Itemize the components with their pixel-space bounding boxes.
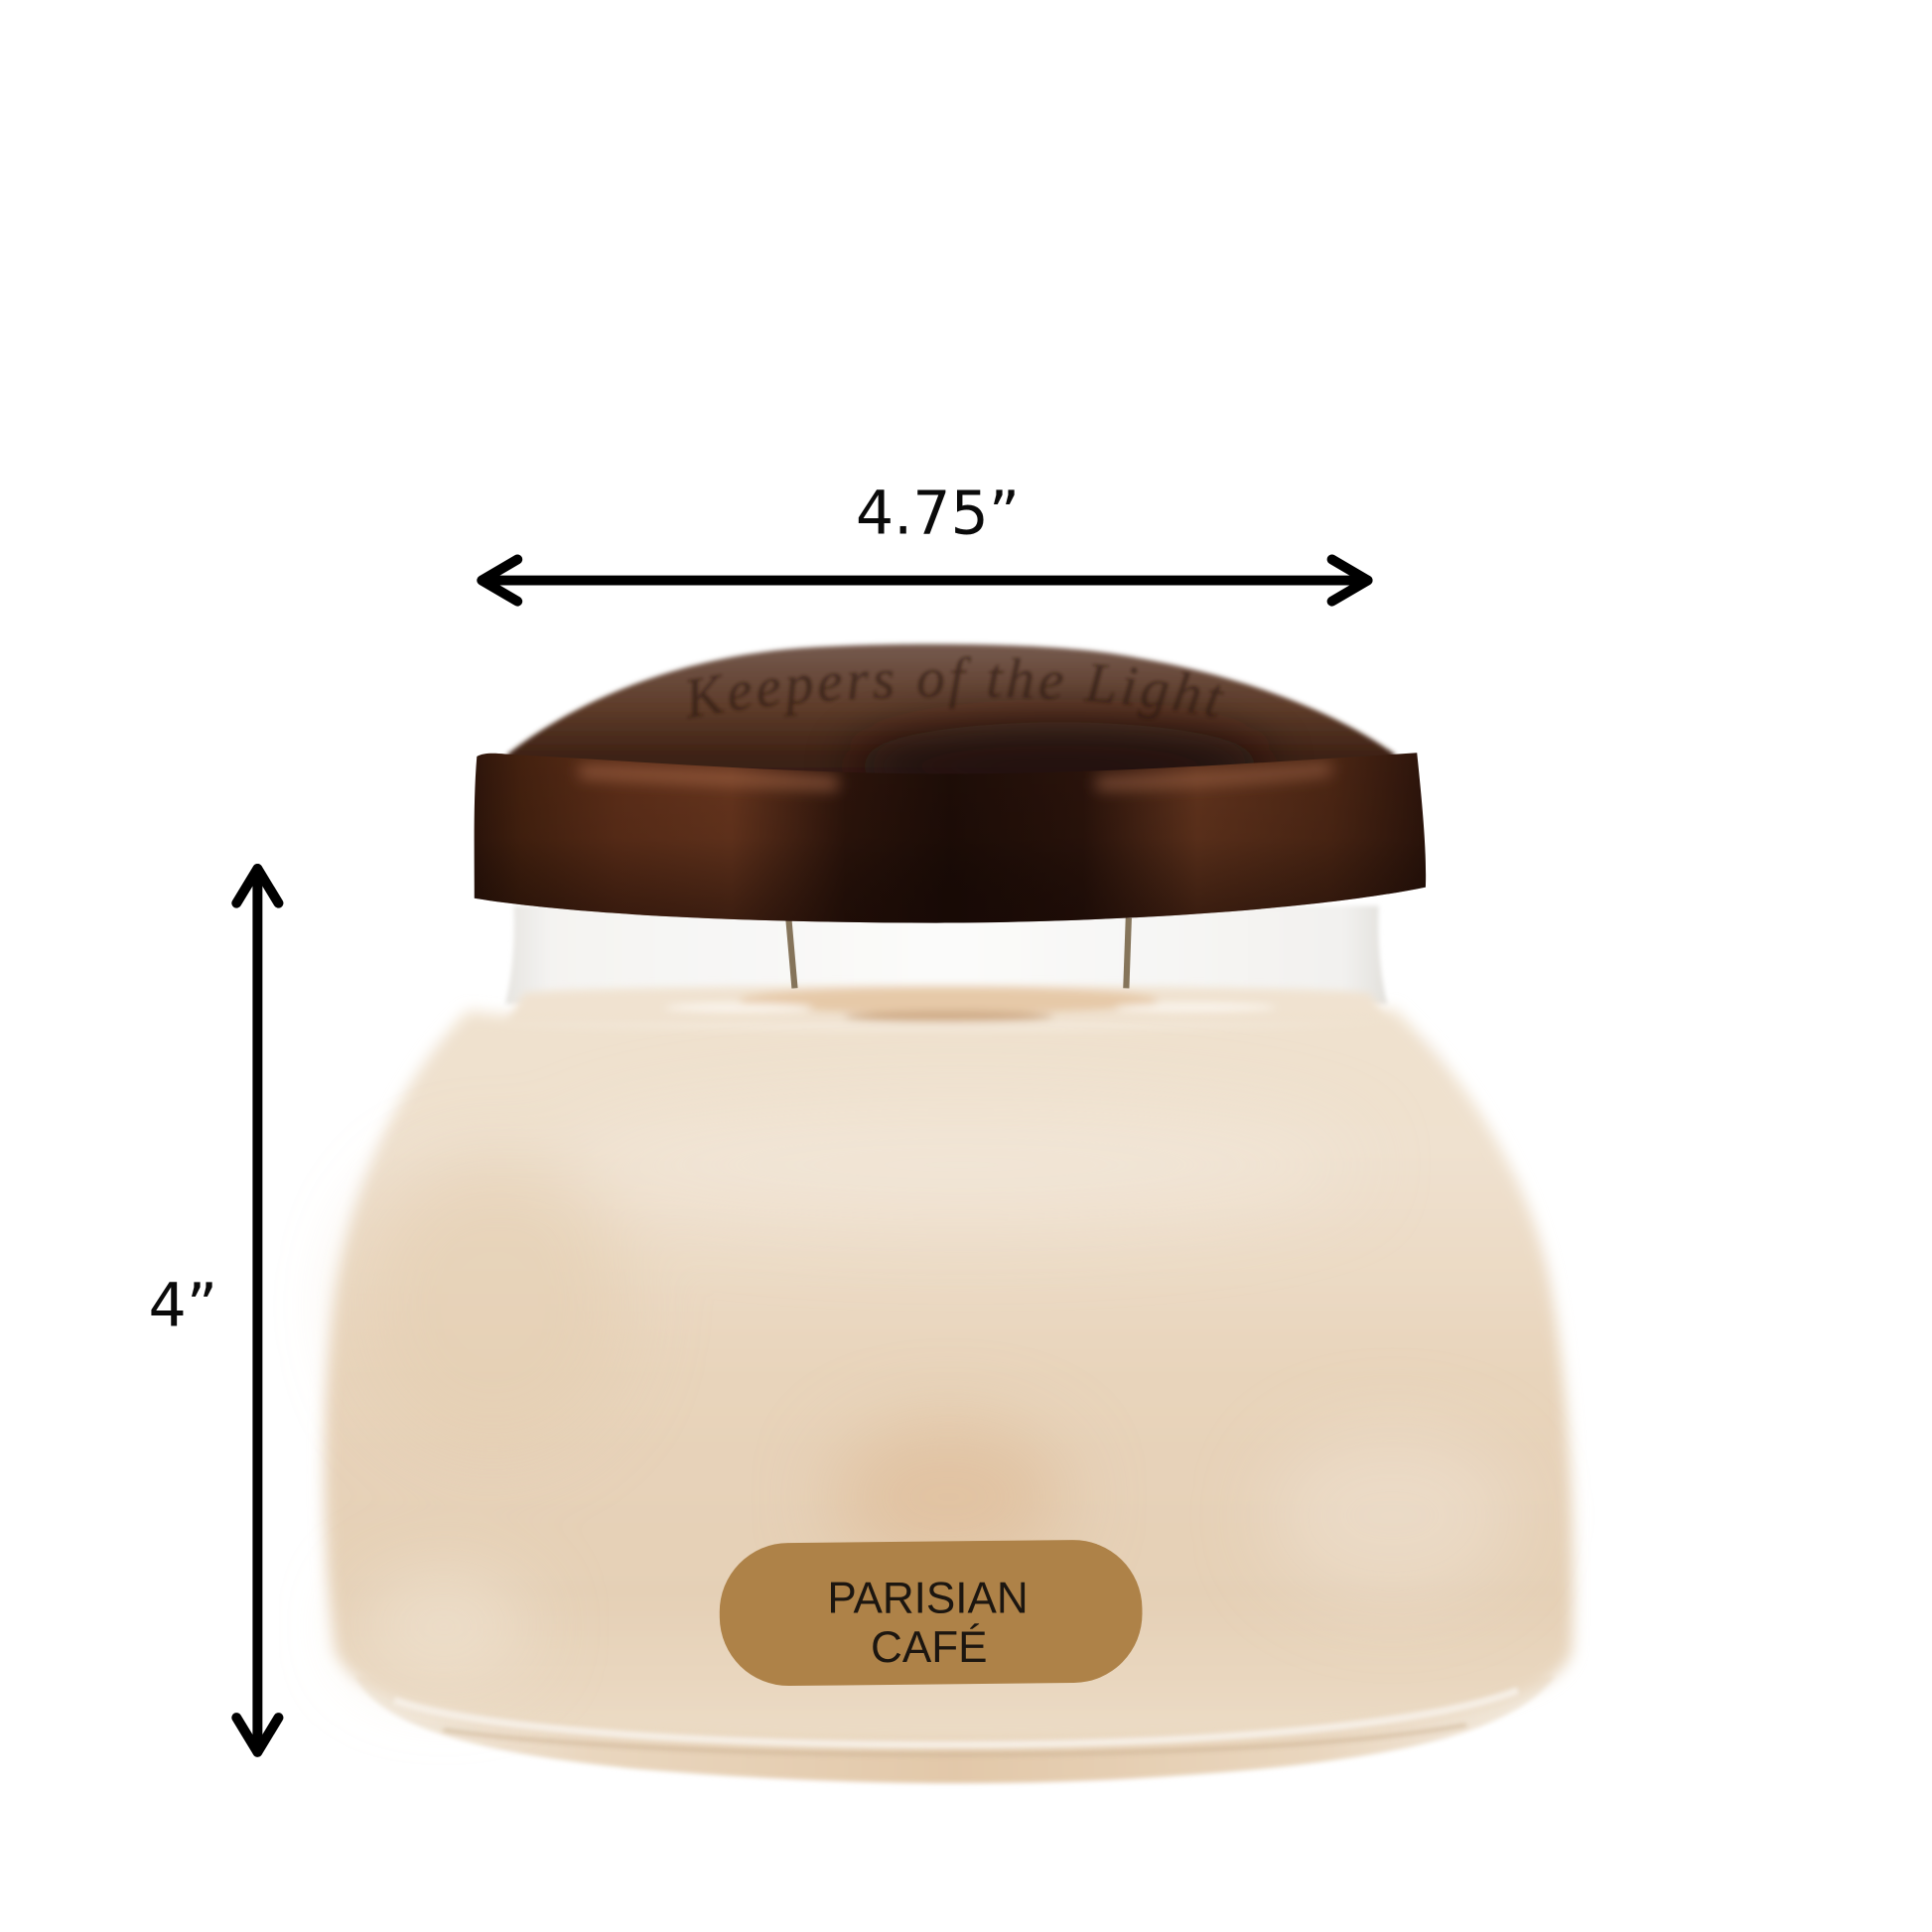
lid rim	[475, 753, 1426, 923]
infographic canvas	[151, 489, 1583, 1786]
wicks	[788, 918, 1129, 988]
width arrow	[482, 559, 1368, 602]
label text: CAFÉ	[871, 1623, 988, 1672]
dome shadow	[850, 722, 1269, 811]
jar foot: clear glass base	[354, 1676, 1555, 1783]
glass base rim highlight	[394, 1691, 1518, 1754]
glass neck	[505, 905, 1387, 1004]
lid dome	[507, 644, 1395, 801]
width label: 4.75”	[856, 479, 1020, 548]
wax body	[324, 1008, 1574, 1744]
bronze lid	[475, 640, 1426, 923]
wax mottling	[357, 1103, 1516, 1682]
height label: 4”	[149, 1271, 217, 1340]
embossed lid lettering: Keepers of the Light	[687, 655, 1224, 719]
candle jar	[315, 640, 1583, 1786]
wax surface inside neck	[505, 986, 1390, 1026]
rim highlight	[579, 768, 1330, 783]
label text	[827, 1575, 1029, 1672]
label text: PARISIAN	[827, 1575, 1029, 1623]
height arrow	[236, 869, 278, 1752]
scent label	[719, 1539, 1143, 1687]
